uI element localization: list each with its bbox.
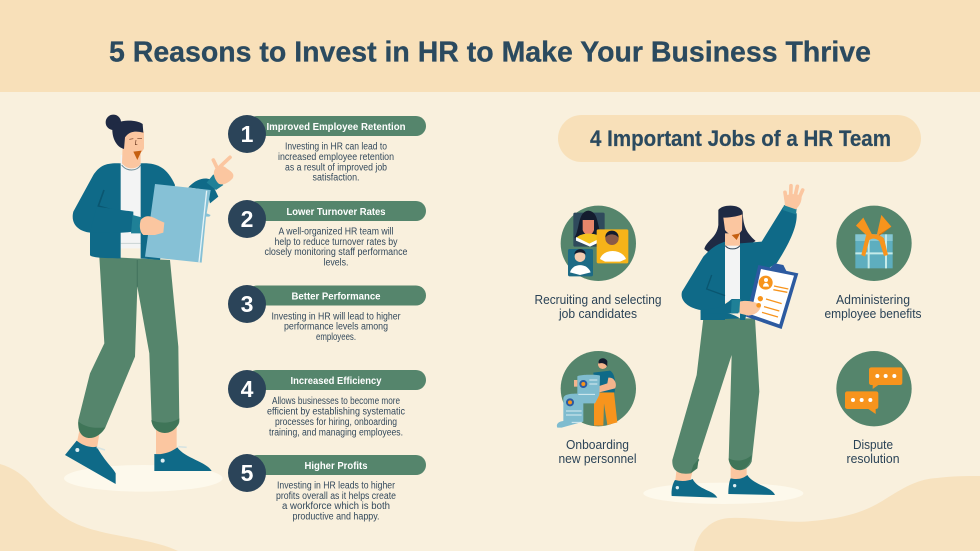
description 2: help to reduce turnover rates by [274,237,398,248]
pill heading 5 [247,455,426,475]
pill heading 3 [247,286,426,306]
pill heading 4: Increased Efficiency [290,376,382,387]
label: recruiting [534,292,662,321]
label: dispute [846,437,900,466]
pill heading 4 [247,370,426,390]
label: onboarding: new personnel [558,451,637,466]
heading pill: 4 important jobs [558,115,921,162]
label: dispute: Dispute [853,437,893,452]
pill heading 1 [247,116,426,136]
number badge 5 [228,454,266,492]
header band [0,0,980,92]
number badge 4 [228,370,266,408]
label: benefits [824,292,922,321]
description 4: efficient by establishing systematic [267,406,405,418]
pill heading 2 [247,201,426,221]
illustration: woman with clipboard [643,186,803,504]
description 5: Investing in HR leads to higher [277,480,396,492]
number badge 1 [228,115,266,153]
description 5: a workforce which is both [282,501,390,512]
reason 5 [228,454,426,522]
number badge 1: 1 [241,121,254,147]
description 3: employees. [316,332,356,343]
heading pill: 4 important jobs: 4 Important Jobs of a HR Team [590,126,891,151]
label: dispute: resolution [846,451,900,466]
description 4: processes for hiring, onboarding [275,417,397,428]
description 1 [278,142,394,184]
description 1: as a result of improved job [285,162,387,174]
reason 4 [228,370,426,438]
description 5 [276,480,396,522]
label: onboarding [558,437,637,466]
pill heading 2: Lower Turnover Rates [286,207,386,218]
icon: recruiting candidates [561,206,636,281]
number badge 4: 4 [241,376,254,402]
description 3: Investing in HR will lead to higher [272,312,401,322]
pill heading 3: Better Performance [292,292,381,302]
description 1: increased employee retention [278,152,394,163]
reason 3 [228,285,426,343]
label: recruiting: Recruiting and selecting [534,292,662,307]
description 4: training, and managing employees. [269,428,403,438]
reason 1 [228,115,426,184]
label: recruiting: job candidates [558,306,637,321]
number badge 2 [228,200,266,238]
description 1: Investing in HR can lead to [285,142,387,152]
label: benefits: Administering [836,292,910,307]
label: onboarding: Onboarding [566,437,629,452]
title: 5 Reasons to Invest in HR to Make Your Business Thrive [109,36,871,68]
description 2: levels. [324,258,348,268]
description 1: satisfaction. [312,172,360,184]
illustration: woman holding folder [64,115,233,492]
description 4: Allows businesses to become more [272,396,400,407]
description 2: closely monitoring staff performance [264,247,408,258]
number badge 3: 3 [241,291,253,317]
reason 2 [228,200,426,268]
number badge 3 [228,285,266,323]
description 5: productive and happy. [292,512,380,522]
icon: gift [836,206,912,281]
description 3: performance levels among [284,322,388,332]
pill heading 1: Improved Employee Retention [266,122,406,133]
description 5: profits overall as it helps create [276,491,396,502]
number badge 2: 2 [241,206,253,232]
description 2: A well-organized HR team will [278,226,394,238]
label: benefits: employee benefits [824,306,922,321]
pill heading 5: Higher Profits [304,461,368,472]
description 3 [272,312,401,343]
icon: onboarding [557,351,636,428]
number badge 5: 5 [241,460,254,486]
description 2 [264,226,408,268]
icon: chat bubbles [836,351,912,426]
description 4 [267,396,405,438]
